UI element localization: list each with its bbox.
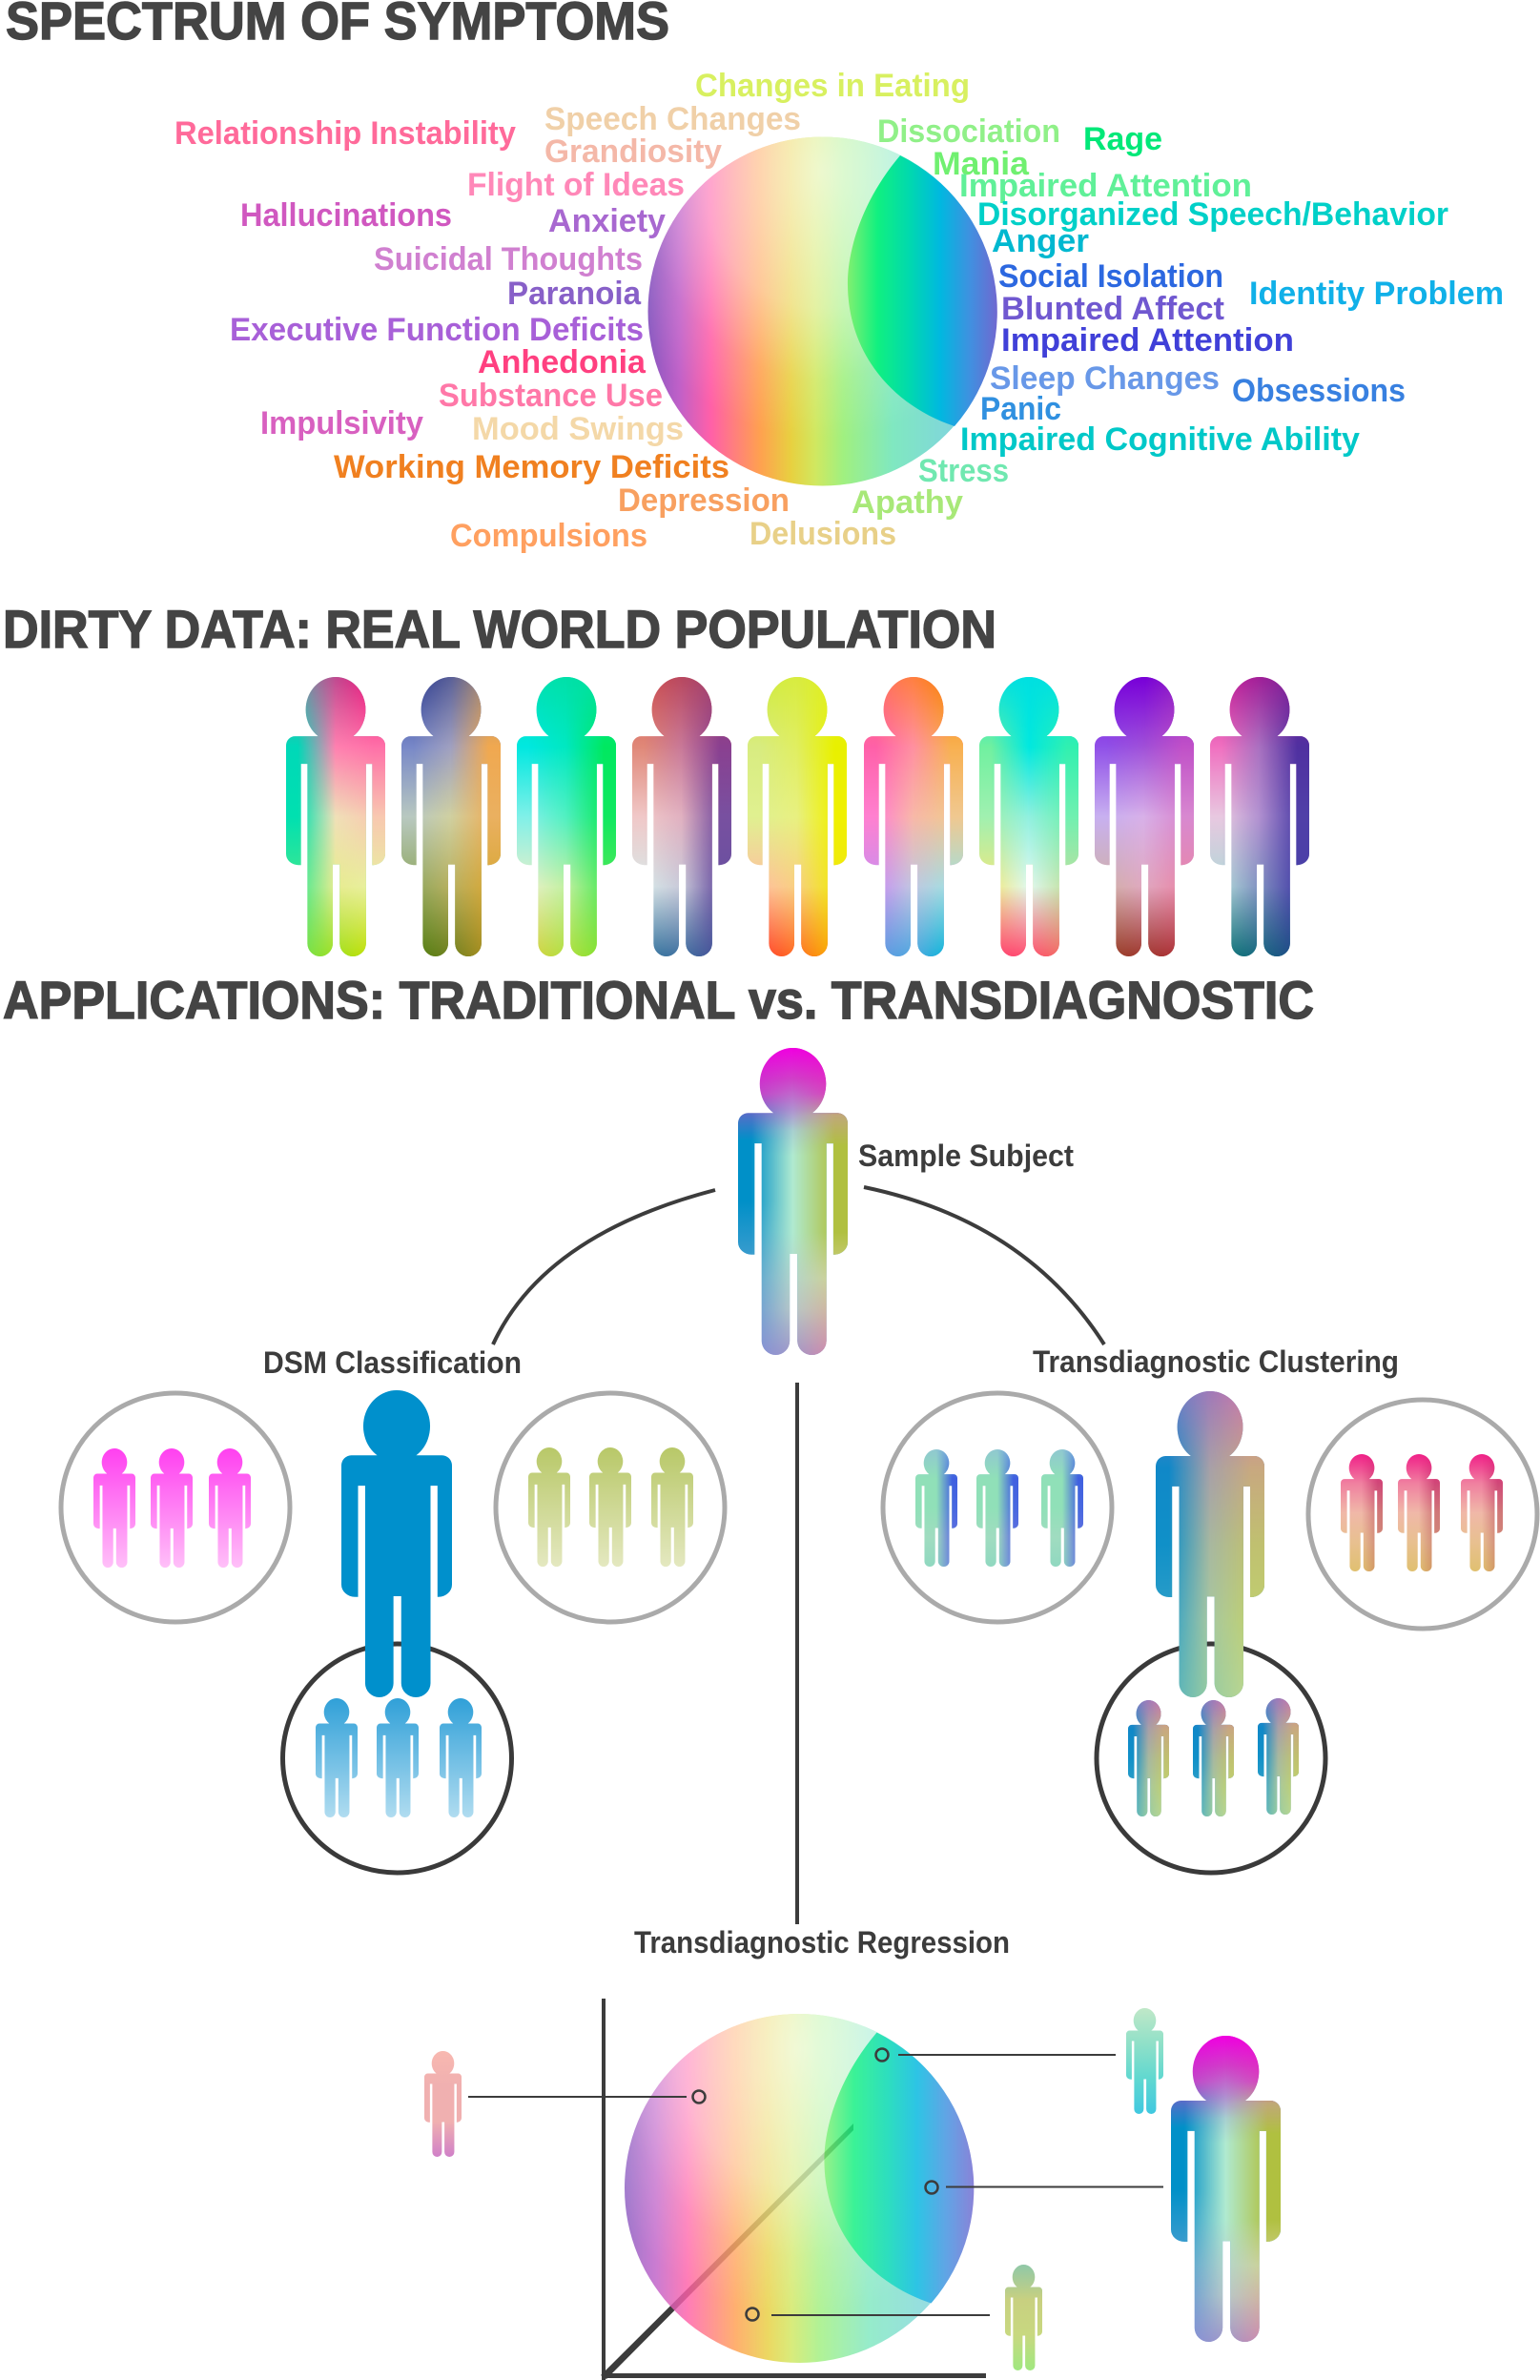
mini selected 3 — [1258, 1698, 1299, 1815]
symptom: Impulsivity — [260, 405, 423, 441]
divider line to regression — [795, 1383, 799, 1924]
mini blue-green 3 — [1041, 1449, 1083, 1567]
symptom: Hallucinations — [240, 197, 452, 234]
symptom: Rage — [1083, 121, 1162, 157]
symptom: Stress — [918, 453, 1009, 489]
connector: left subject — [468, 2090, 706, 2103]
person 5 — [748, 677, 847, 956]
symptom: Relationship Instability — [175, 115, 516, 152]
person 4 — [632, 677, 731, 956]
symptom: Obsessions — [1232, 373, 1406, 409]
mini pink 1 — [1341, 1454, 1383, 1571]
person 6 — [864, 677, 963, 956]
mini blue 1 — [316, 1698, 358, 1817]
symptom: Panic — [980, 391, 1061, 427]
symptom: Changes in Eating — [695, 68, 970, 104]
person 8 — [1095, 677, 1194, 956]
symptom: Flight of Ideas — [467, 167, 685, 203]
chart axes — [601, 1999, 986, 2380]
symptom: Apathy — [852, 484, 963, 521]
panel: spectrum of symptoms — [6, 0, 1504, 554]
mini blue 3 — [440, 1698, 482, 1817]
symptom: Delusions — [749, 516, 896, 552]
circle: selected blue group — [282, 1644, 511, 1873]
symptom: Depression — [618, 482, 790, 519]
circle: olive group — [496, 1393, 725, 1622]
symptom: Anxiety — [548, 203, 666, 239]
symptom: Impaired Attention — [959, 168, 1252, 204]
symptom: Paranoia — [507, 276, 642, 312]
mini olive 1 — [528, 1447, 570, 1567]
heading: applications: APPLICATIONS: TRADITIONAL vs. TRANSDIAGNOSTIC — [3, 970, 1314, 1030]
circle: pink group — [1308, 1400, 1537, 1629]
big blue figure — [341, 1390, 452, 1697]
circle: magenta group — [61, 1393, 290, 1622]
person 7 — [979, 677, 1078, 956]
mini magenta 2 — [151, 1448, 193, 1568]
symptom word cloud — [175, 68, 1504, 554]
circle: blue-green group — [883, 1393, 1112, 1622]
symptom: Speech Changes — [544, 101, 801, 137]
mini blue 2 — [377, 1698, 419, 1817]
mini pink 3 — [1461, 1454, 1503, 1571]
symptom: Substance Use — [439, 378, 663, 414]
person 2 — [401, 677, 501, 956]
arc to DSM classification — [493, 1190, 715, 1344]
symptom: Identity Problem — [1249, 276, 1504, 312]
symptom: Disorganized Speech/Behavior — [977, 196, 1448, 233]
mini pink 2 — [1398, 1454, 1440, 1571]
symptom: Executive Function Deficits — [230, 312, 644, 348]
spectrum orb — [648, 137, 997, 486]
person 3 — [517, 677, 616, 956]
small figure: top right — [1126, 2008, 1163, 2114]
panel: transdiagnostic clustering — [881, 1349, 1539, 1875]
connector: top right subject — [875, 2048, 1116, 2062]
big sample subject figure — [1171, 2036, 1281, 2342]
sample subject figure — [738, 1048, 848, 1355]
person 1 — [286, 677, 385, 956]
symptom: Impaired Attention — [1001, 322, 1294, 359]
mini olive 2 — [589, 1447, 631, 1567]
symptom: Working Memory Deficits — [334, 449, 729, 485]
symptom: Blunted Affect — [1001, 291, 1224, 327]
panel: DSM classification — [59, 1349, 727, 1875]
symptom: Anger — [992, 223, 1089, 259]
symptom: Impaired Cognitive Ability — [960, 421, 1360, 458]
connector: sample subject — [925, 2182, 1163, 2193]
label: sample subject: Sample Subject — [858, 1139, 1074, 1173]
big gradient figure — [1156, 1391, 1264, 1697]
symptom: Grandiosity — [544, 133, 722, 170]
mini blue-green 2 — [976, 1449, 1018, 1567]
heading: dirty data: DIRTY DATA: REAL WORLD POPULATION — [3, 599, 996, 659]
symptom: Sleep Changes — [990, 360, 1220, 397]
person 9 — [1210, 677, 1309, 956]
small figure: left — [424, 2051, 462, 2157]
symptom: Dissociation — [877, 113, 1060, 150]
symptom: Compulsions — [450, 518, 647, 554]
panel: applications — [3, 970, 1539, 2380]
circle: selected group — [1097, 1644, 1325, 1873]
arc to transdiagnostic clustering — [864, 1187, 1104, 1344]
mini magenta 3 — [209, 1448, 251, 1568]
sample subject with arcs — [491, 1048, 1106, 1355]
symptom: Social Isolation — [998, 258, 1223, 295]
mini selected 2 — [1193, 1700, 1234, 1816]
symptom: Mania — [933, 146, 1030, 182]
regression orb — [625, 2014, 974, 2363]
small figure: lower — [1005, 2265, 1042, 2370]
symptom: Suicidal Thoughts — [374, 241, 643, 277]
mini magenta 1 — [93, 1448, 135, 1568]
label: transdiagnostic regression: Transdiagnostic Regression — [634, 1926, 1010, 1959]
symptom: Anhedonia — [478, 344, 647, 380]
mini blue-green 1 — [915, 1449, 957, 1567]
mini olive 3 — [651, 1447, 693, 1567]
panel: transdiagnostic regression — [424, 1926, 1281, 2380]
symptom: Mood Swings — [472, 411, 684, 447]
mini selected 1 — [1128, 1700, 1169, 1816]
panel: dirty data real world population — [3, 599, 1309, 956]
connector: lower subject — [746, 2308, 990, 2321]
